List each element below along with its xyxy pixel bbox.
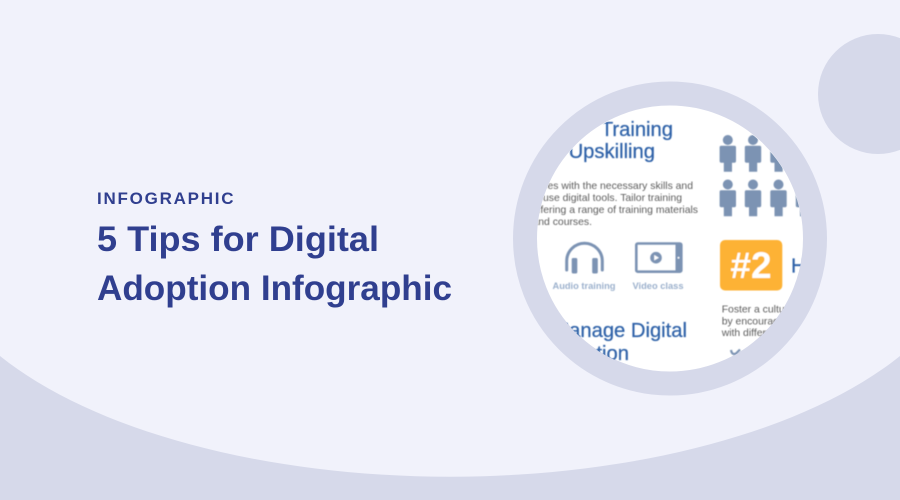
heading: manage digital adoption: Manage Digital <box>552 320 687 342</box>
badge: number 2 <box>720 240 782 290</box>
eyebrow label: INFOGRAPHIC <box>97 189 235 208</box>
culture body text <box>721 304 784 337</box>
title <box>97 220 452 308</box>
heading: manage digital adoption <box>566 321 687 361</box>
culture body text: by encouraging employees <box>722 316 846 327</box>
training body text <box>538 181 698 226</box>
heading: training and upskilling: Training <box>601 119 673 141</box>
heading fragment beside badge: Hybrid <box>791 256 849 278</box>
icon labels: Audio training <box>552 281 616 291</box>
heading: manage digital adoption: Adoption <box>549 343 629 365</box>
icon labels: Video class <box>632 281 684 291</box>
title: 5 Tips for Digital <box>97 220 379 259</box>
culture body text: with different tools <box>721 328 805 339</box>
icon fragment <box>731 350 740 354</box>
culture body text: Foster a culture of learning <box>722 304 846 315</box>
training body text: Equip employees with the necessary skills and <box>479 181 693 192</box>
bottom curved band <box>0 356 900 500</box>
people pictogram <box>720 135 812 216</box>
training body text: by offering a range of training materials <box>518 205 698 216</box>
badge: number 2: #2 <box>730 245 772 286</box>
magnifier ring <box>525 94 815 384</box>
icon: video tablet <box>636 243 682 272</box>
magnified infographic preview <box>538 120 802 361</box>
title: Adoption Infographic <box>97 269 452 308</box>
training body text: knowledge to use digital tools. Tailor training <box>479 193 682 204</box>
icon: headphones <box>567 243 602 274</box>
training body text: and courses. <box>532 217 592 228</box>
heading: training and upskilling: and Upskilling <box>529 141 655 163</box>
decorative circle top right <box>818 34 900 154</box>
icon labels <box>552 281 684 291</box>
heading: training and upskilling <box>569 120 673 163</box>
